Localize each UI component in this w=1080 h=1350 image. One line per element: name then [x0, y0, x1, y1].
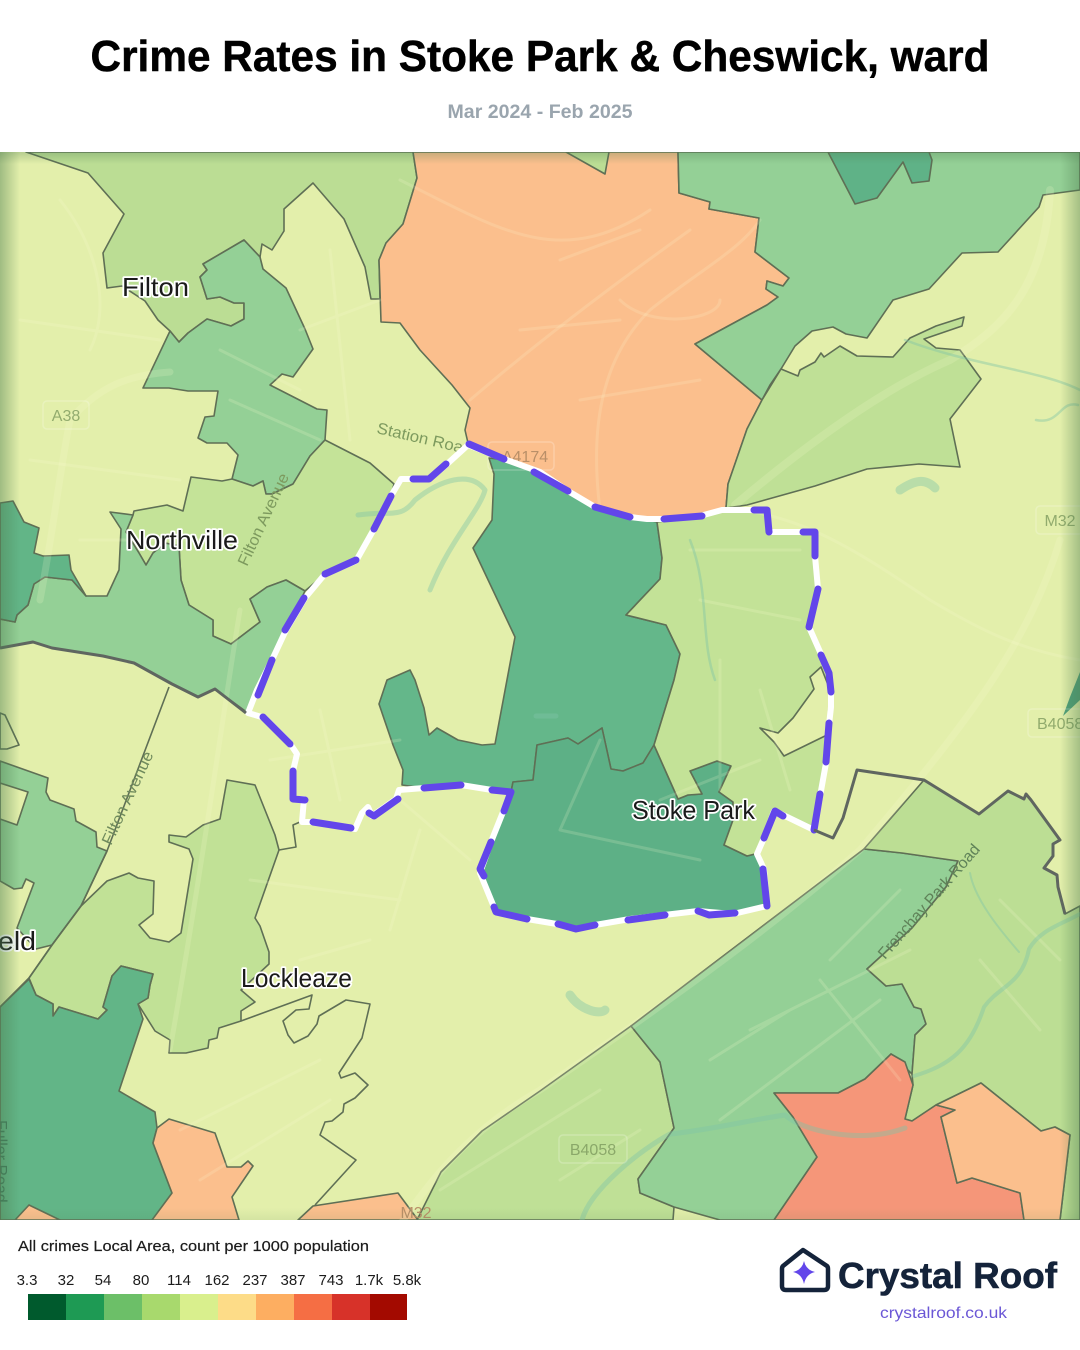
- legend scale numbers: 3.3: [17, 1272, 37, 1289]
- place label: Northville: Northville: [126, 525, 238, 555]
- legend: [17, 1238, 422, 1320]
- area: Lockleaze lime: [29, 780, 279, 1053]
- road label: Station Road: Station Roa: [375, 420, 465, 457]
- legend scale numbers: 743: [318, 1272, 344, 1289]
- map edge vignette: [0, 152, 1080, 1220]
- road label: A38: A38: [52, 408, 80, 425]
- road label: M32 east: M32: [1044, 513, 1076, 530]
- place label: Filton: Filton: [122, 272, 189, 302]
- road label: M32 south: M32: [400, 1205, 432, 1222]
- area: bottom orange fragment: [298, 1193, 418, 1220]
- legend scale numbers: [17, 1272, 422, 1289]
- place label: Stoke Park: Stoke Park: [632, 795, 756, 825]
- brand url: crystalroof.co.uk: [880, 1305, 1008, 1322]
- area: south-west orange: [152, 1119, 253, 1220]
- area: east lime (Frenchay): [864, 780, 1080, 1220]
- logo: Crystal Roof: [782, 1250, 1058, 1322]
- map panel: [0, 152, 1080, 1225]
- road network: [20, 180, 1080, 1225]
- area: ward east lime: [626, 510, 831, 856]
- area: Filton mid green: [143, 240, 327, 494]
- water features: [358, 340, 1080, 1220]
- area: north orange high-crime zone: [379, 152, 789, 519]
- area: Northville mid green: [0, 512, 305, 713]
- legend title: All crimes Local Area, count per 1000 population: [18, 1238, 369, 1255]
- legend scale numbers: 5.8k: [393, 1272, 422, 1289]
- thick outer boundary: east: [814, 770, 1065, 914]
- area: south-east mid green: [631, 849, 958, 1220]
- legend scale numbers: 114: [167, 1272, 191, 1289]
- road label: Filton Avenue south: Filton Avenue: [99, 749, 157, 848]
- legend scale numbers: 237: [242, 1272, 268, 1289]
- area: south ward dark green: [480, 728, 767, 929]
- icon: house with star: [782, 1250, 828, 1290]
- area: small outlined west parcel: [0, 713, 19, 749]
- area: Filton lime: [26, 152, 417, 342]
- legend colour swatches: [28, 1294, 407, 1320]
- area: south-east orange: [936, 1083, 1070, 1220]
- road label: M32 east: [1036, 506, 1080, 534]
- title: Crime Rates in Stoke Park & Cheswick, ward: [90, 32, 990, 81]
- legend scale numbers: 1.7k: [355, 1272, 384, 1289]
- area: south-west dark green: [0, 966, 172, 1220]
- area: Lockleaze boundary line: [241, 995, 370, 1205]
- legend scale numbers: 80: [133, 1272, 149, 1289]
- area: east dark wedge: [1063, 672, 1080, 716]
- road label: Filton Avenue north: Filton Avenue: [235, 471, 293, 569]
- legend scale numbers: 54: [95, 1272, 111, 1289]
- area: north dark green patch: [828, 152, 932, 204]
- place label: Lockleaze: Lockleaze: [241, 963, 352, 993]
- area: west lime parcel edge: [279, 822, 300, 850]
- road label: A4174: [488, 442, 554, 470]
- area: bottom-left orange fragment: [15, 1205, 60, 1220]
- area: small lime sliver at top: [566, 152, 609, 174]
- area: west mid green: [0, 761, 107, 949]
- road label: Frenchay Park Road: Frenchay Park Road: [875, 841, 984, 963]
- map base: [0, 152, 1080, 1220]
- area: south lime (B4058): [417, 1026, 674, 1220]
- area: Filton Avenue boundary line: [0, 687, 169, 1007]
- area: east lime: [726, 317, 981, 508]
- legend scale numbers: 387: [280, 1272, 306, 1289]
- road label: B4058 south: [559, 1135, 627, 1163]
- legend scale numbers: 32: [58, 1272, 74, 1289]
- thick outer boundary: west: [0, 642, 246, 713]
- road label: A38: [43, 401, 89, 429]
- area: red-orange high-crime zone: [774, 1054, 1024, 1220]
- area: far west dark green: [0, 501, 86, 622]
- subtitle: date range: Mar 2024 - Feb 2025: [448, 102, 633, 123]
- area: north-east mid green: [678, 152, 1080, 400]
- legend scale numbers: 162: [204, 1272, 230, 1289]
- area: ward east notch: [760, 667, 830, 756]
- road label: B4058 east: [1028, 709, 1080, 737]
- road label: A4174: A4174: [502, 449, 548, 466]
- ward boundary: white outline: [248, 445, 831, 929]
- area: central dark green (north ward): [379, 458, 680, 792]
- ward boundary: purple dashes: [258, 444, 831, 929]
- road label: B4058 south: B4058: [570, 1142, 616, 1159]
- brand name: Crystal Roof: [838, 1255, 1058, 1296]
- area: Northville lime: [126, 440, 394, 644]
